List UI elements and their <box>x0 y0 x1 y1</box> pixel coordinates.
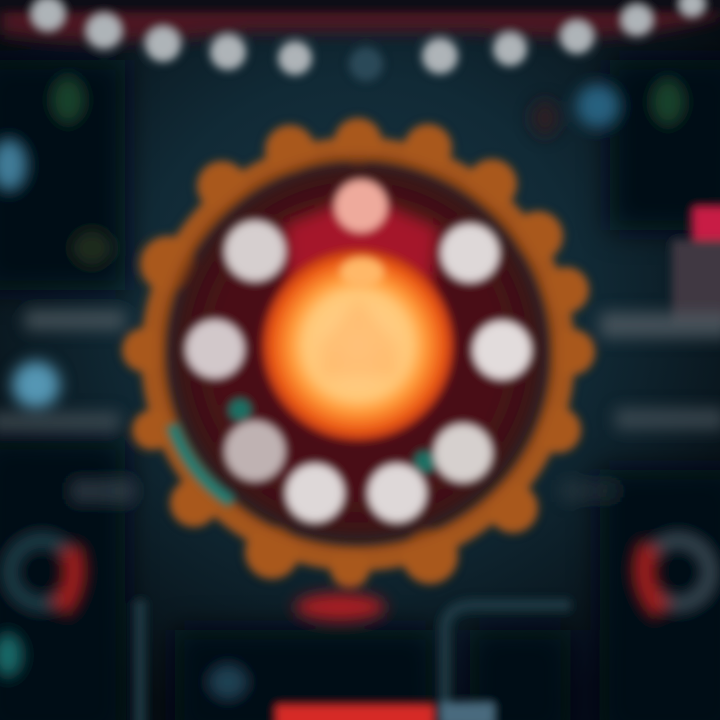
central sun <box>262 249 454 441</box>
teal arc <box>172 425 232 502</box>
bottom panels <box>140 600 570 720</box>
icon: dark red right <box>531 100 559 136</box>
icon: blue left <box>0 139 27 191</box>
right card <box>672 206 720 325</box>
bottom red bar <box>275 704 435 720</box>
white nodes <box>185 179 532 523</box>
side text bars <box>0 310 720 504</box>
icon: green right <box>651 78 685 126</box>
red wedge behind top node <box>285 195 438 300</box>
icon: dark green left <box>72 230 112 266</box>
lower side gauges <box>10 540 710 612</box>
icon: blue lower left <box>12 361 60 409</box>
gauge: right <box>644 540 710 612</box>
icon: teal bottom left <box>0 633 22 677</box>
scalloped orange ring <box>122 118 595 588</box>
bottom grey bar <box>440 702 495 720</box>
dark maroon disc <box>168 162 548 542</box>
bottom red marker <box>295 593 385 621</box>
top row of white nodes <box>31 0 705 81</box>
sun top highlight <box>340 257 384 287</box>
gauge: left <box>10 540 74 610</box>
pink tab <box>692 206 720 240</box>
icon: blue top right <box>576 84 620 128</box>
teal accents <box>228 398 437 474</box>
red top band <box>0 0 720 42</box>
top banner <box>0 0 720 81</box>
central emblem <box>320 298 398 378</box>
icon: bottom blue <box>208 664 248 700</box>
icon: green left <box>51 76 85 124</box>
central wheel <box>122 118 595 588</box>
